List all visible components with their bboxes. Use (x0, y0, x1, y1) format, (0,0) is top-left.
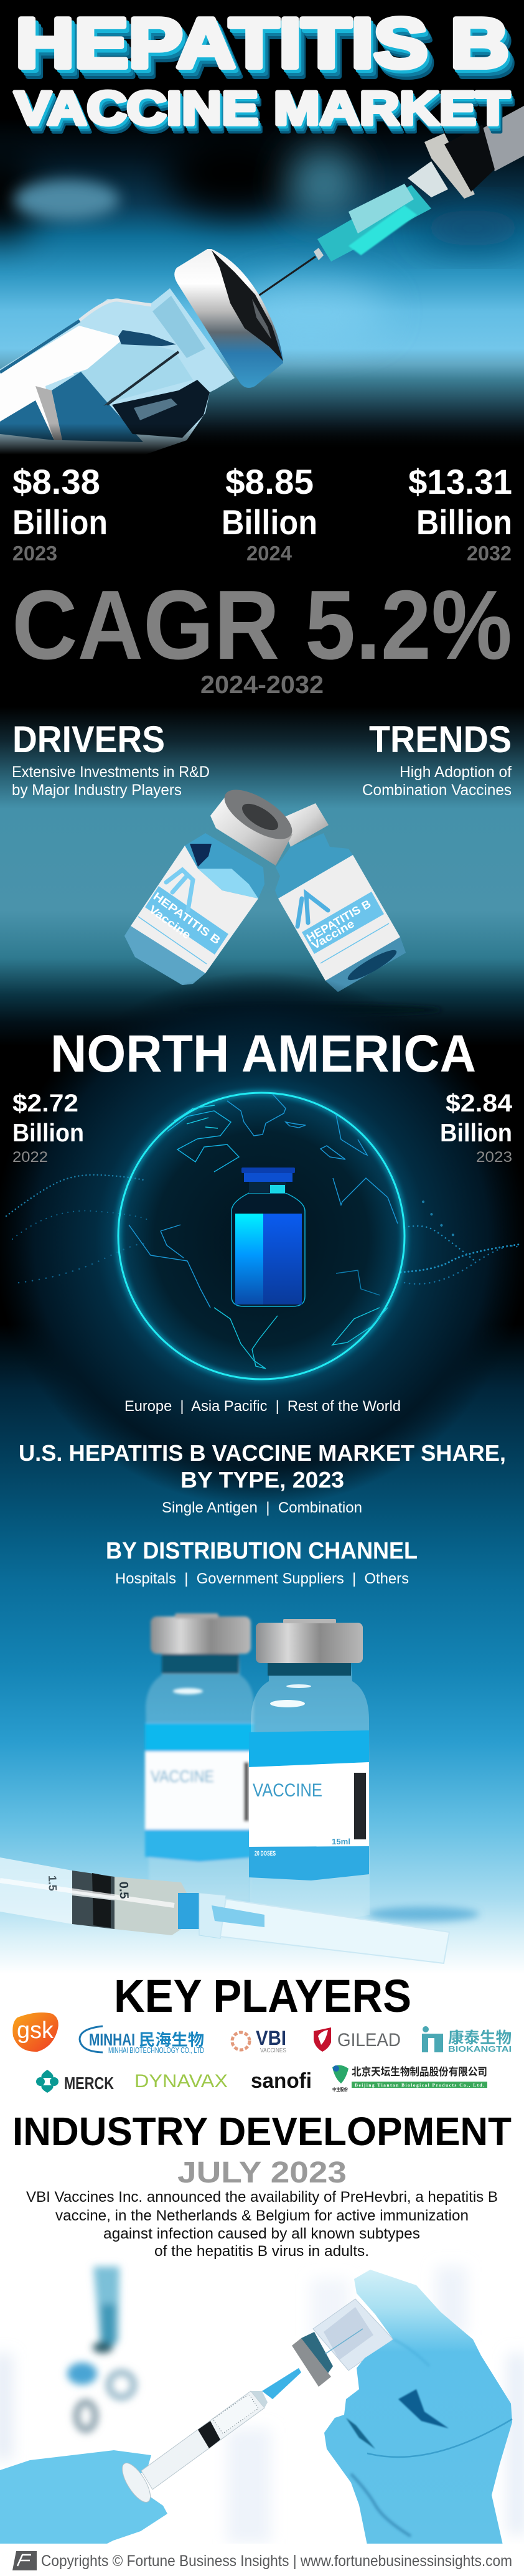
logo: VBI Vaccines: VBI (256, 2027, 286, 2049)
title line 2: VACCINE MARKET (19, 90, 513, 142)
vial cap (174, 249, 283, 388)
blurred lab background (0, 2267, 524, 2544)
logo: Merck: MERCK (64, 2074, 114, 2093)
logo: Beijing Tiantan: Beijing Tiantan Biological Products Co., Ltd. (355, 2082, 484, 2088)
date: July 2023: JULY 2023 (177, 2156, 347, 2189)
logo: Dynavax: DYNAVAX (134, 2071, 228, 2092)
title line 2: VACCINE MARKET (14, 82, 510, 135)
stat: North America 2022 (12, 1090, 84, 1166)
left vial (124, 780, 299, 985)
title line 1: HEPATITIS B (19, 8, 511, 85)
right glove (324, 2270, 512, 2545)
panel: drivers (12, 719, 210, 799)
stat: 2032 market size (408, 462, 512, 565)
logo: Beijing Tiantan: 北京天坛生物制品股份有限公司 (352, 2065, 487, 2078)
stat: 2024 market size: Billion (222, 502, 317, 542)
stat: 2024 market size (222, 462, 317, 565)
logo: VBI Vaccines: VACCINES (260, 2047, 286, 2054)
title line 1: HEPATITIS B (16, 4, 509, 82)
logos: key players (12, 2012, 512, 2093)
heading: key players: KEY PLAYERS (114, 1970, 411, 2022)
stat: North America 2023: $2.84 (446, 1090, 513, 1117)
heading: market share by type: BY TYPE, 2023 (180, 1467, 344, 1493)
vial body (0, 288, 235, 455)
stat: 2024 market size: $8.85 (225, 462, 314, 501)
panel: drivers: Extensive Investments in R&D (12, 763, 210, 781)
needle hub (317, 184, 431, 262)
distribution channel list: Hospitals | Government Suppliers | Others (115, 1570, 409, 1587)
logo: Gilead (314, 2027, 401, 2052)
hero backdrop (0, 118, 524, 461)
right vial (275, 803, 406, 992)
stat: 2023 market size: 2023 (12, 542, 57, 565)
heading: market share by type: U.S. HEPATITIS B VACCINE MARKET SHARE, (19, 1440, 506, 1466)
logo: GSK: gsk (17, 2017, 54, 2044)
logo: Beijing Tiantan (332, 2065, 487, 2092)
stat: 2032 market size: $13.31 (408, 462, 512, 501)
continents (129, 1094, 398, 1369)
panel: north america globe (0, 971, 524, 1507)
panel: trends: TRENDS (369, 719, 512, 760)
title line 1: HEPATITIS B (21, 11, 513, 88)
central vial (232, 1168, 305, 1306)
stat: 2032 market size: 2032 (467, 542, 512, 565)
front vial: 15ml (332, 1837, 350, 1846)
stat: North America 2023: Billion (440, 1118, 512, 1147)
development description (26, 2189, 498, 2260)
panel: trends (362, 719, 512, 799)
glove creases (346, 2339, 512, 2536)
logo: Merck (36, 2070, 114, 2093)
photo: two vaccine vials and syringe (0, 1613, 479, 1963)
particle dots (6, 1175, 522, 1284)
logo: Minhai: 民海生物 (139, 2031, 204, 2049)
CAGR period: 2024-2032 (200, 671, 324, 699)
syringe (117, 2368, 301, 2506)
stat: 2023 market size (12, 462, 108, 565)
stat: North America 2022: 2022 (12, 1149, 48, 1166)
development description: VBI Vaccines Inc. announced the availability of PreHevbri, a hepatitis B (26, 2189, 498, 2206)
front vial (249, 1619, 370, 1920)
footer logo (12, 2551, 37, 2570)
globe outline (118, 1093, 405, 1379)
logo: Minhai: MINHAI BIOTECHNOLOGY CO., LTD (108, 2045, 204, 2055)
stat: North America 2022: $2.72 (12, 1090, 78, 1117)
photo: gloved hands filling syringe (0, 2267, 524, 2545)
panel: hero image of syringe and vial (0, 106, 524, 461)
needle (254, 248, 324, 299)
logo: Beijing Tiantan: 中生股份 (332, 2087, 348, 2092)
syringe: 0.5 (116, 1881, 131, 1899)
panel: trends: High Adoption of (400, 763, 512, 781)
logo: Biokangtai: BIOKANGTAI (448, 2044, 512, 2054)
title (14, 4, 515, 142)
stat: 2023 market size: $8.38 (12, 462, 100, 501)
stat: North America 2023 (440, 1090, 513, 1166)
right vial: HEPATITIS B (304, 897, 373, 944)
logo: Minhai: MINHAI (89, 2030, 135, 2049)
heading: North America: NORTH AMERICA (50, 1024, 476, 1083)
heading: industry development: INDUSTRY DEVELOPMENT (12, 2109, 512, 2154)
footer (0, 2544, 524, 2576)
logo: Minhai (80, 2026, 204, 2055)
left vial: HEPATITIS B (151, 890, 223, 946)
development description: against infection caused by all known subtypes (103, 2225, 420, 2242)
glass vial (292, 2299, 393, 2387)
logo: Biokangtai (422, 2026, 512, 2054)
development description: of the hepatitis B virus in adults. (154, 2243, 369, 2260)
title line 2: VACCINE MARKET (17, 85, 511, 137)
regions list: Europe | Asia Pacific | Rest of the World (124, 1398, 401, 1415)
globe glow (0, 971, 524, 1507)
panel: trends: Combination Vaccines (362, 781, 512, 799)
blurred scissors (67, 2267, 134, 2430)
illustration: pair of Hepatitis B vials (124, 780, 442, 1016)
panel: drivers: by Major Industry Players (12, 781, 182, 799)
heading: by distribution channel: BY DISTRIBUTION CHANNEL (106, 1538, 418, 1564)
title line 2: VACCINE MARKET (18, 87, 512, 139)
panel: drivers: DRIVERS (12, 719, 165, 760)
heading: market share by type (19, 1440, 506, 1493)
stat: North America 2023: 2023 (476, 1149, 512, 1166)
stat: 2024 market size: 2024 (246, 542, 292, 565)
front vial: VACCINE (253, 1780, 322, 1801)
syringe: 1.5 (46, 1875, 59, 1891)
back vial: VACCINE (151, 1767, 214, 1786)
stat: 2032 market size: Billion (416, 502, 512, 542)
logo: Biokangtai: 康泰生物 (448, 2029, 512, 2047)
title line 1: HEPATITIS B (23, 14, 515, 92)
logo: Gilead: GILEAD (337, 2030, 401, 2050)
syringe (0, 1857, 449, 1963)
type list: Single Antigen | Combination (162, 1499, 362, 1516)
back vial (145, 1613, 254, 1901)
front vial: 20 DOSES (255, 1850, 276, 1857)
development description: vaccine, in the Netherlands & Belgium for active immunization (55, 2207, 469, 2224)
logo: VBI Vaccines (232, 2027, 286, 2054)
syringe barrel (408, 106, 524, 199)
left vial: Vaccine (147, 903, 194, 941)
right vial: Vaccine (309, 917, 357, 951)
logo: GSK (12, 2012, 58, 2052)
left glove (0, 2450, 167, 2544)
stat: 2023 market size: Billion (12, 502, 108, 542)
stat: North America 2022: Billion (12, 1118, 84, 1147)
logo: Sanofi: sanofi (251, 2069, 312, 2093)
